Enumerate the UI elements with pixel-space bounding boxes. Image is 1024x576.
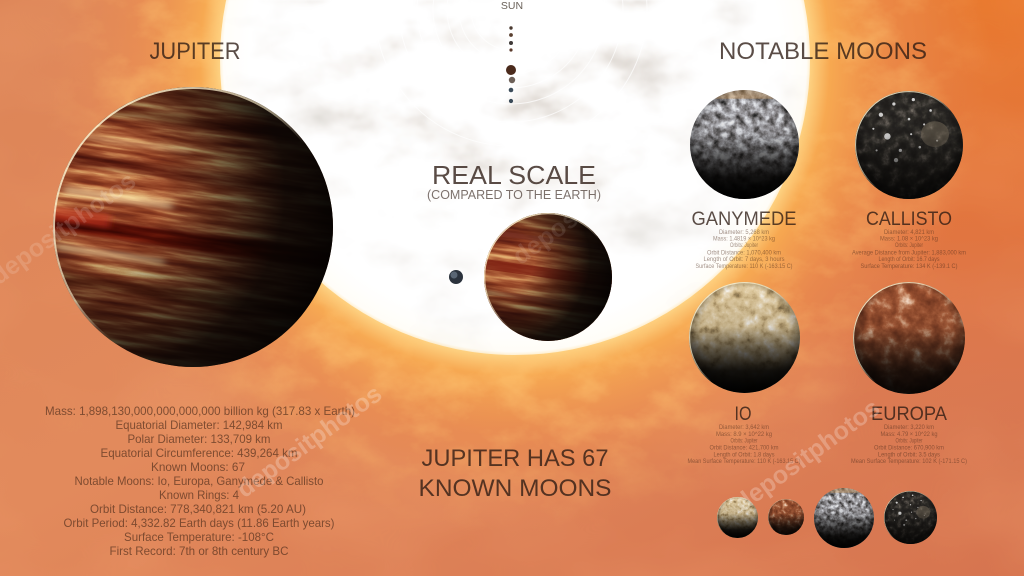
watermarks: depositphotos xyxy=(729,394,885,517)
moon facts: Io xyxy=(688,404,800,465)
callout: moon count: KNOWN MOONS xyxy=(418,475,612,502)
moon facts: Ganymede: Mass: 1.4819 × 10^23 kg xyxy=(713,236,775,242)
heading: real scale xyxy=(427,160,601,202)
Jupiter facts list: Orbit Distance: 778,340,821 km (5.20 AU) xyxy=(90,502,306,516)
watermarks xyxy=(0,0,885,517)
Jupiter facts list xyxy=(45,404,355,558)
watermarks: depositphotos xyxy=(507,147,663,270)
moon facts: Ganymede: Diameter: 5,268 km xyxy=(719,229,769,236)
planet: Earth scale dot xyxy=(449,270,463,284)
planet: Jupiter real scale xyxy=(484,213,612,341)
moon facts: Callisto: Length of Orbit: 16.7 days xyxy=(878,256,940,263)
moon facts: Io: Mean Surface Temperature: 110 K (-163.15 C) xyxy=(688,458,800,465)
moon facts: Europa: Length of Orbit: 3.5 days xyxy=(878,452,940,458)
moon size comparison row xyxy=(717,488,937,548)
Jupiter facts list: First Record: 7th or 8th century BC xyxy=(110,544,289,558)
moon facts: Ganymede: GANYMEDE xyxy=(692,209,796,230)
Jupiter facts list: Equatorial Circumference: 439,264 km xyxy=(100,446,298,460)
moon facts: Europa: Diameter: 3,220 km xyxy=(884,424,934,431)
moon facts: Ganymede: Orbit Distance: 1,070,400 km xyxy=(707,250,781,256)
moon facts: Io: Length of Orbit: 1.8 days xyxy=(714,452,774,458)
Jupiter facts list: Known Moons: 67 xyxy=(151,460,245,474)
moon facts: Europa: Orbits: Jupiter xyxy=(896,438,922,444)
moon: Ganymede xyxy=(690,90,799,199)
Jupiter facts list: Equatorial Diameter: 142,984 km xyxy=(116,418,282,432)
moon facts: Callisto: Average Distance from Jupiter: 1,883,000 km xyxy=(852,250,966,256)
moon: Europa xyxy=(853,282,965,394)
sun label: SUN xyxy=(501,0,523,12)
solar system orbits xyxy=(375,0,647,146)
moon facts: Callisto: Diameter: 4,821 km xyxy=(884,229,934,236)
moon facts: Europa: EUROPA xyxy=(871,404,947,425)
moon facts: Callisto xyxy=(852,209,966,270)
moon facts: Europa xyxy=(851,404,967,465)
Jupiter facts list: Mass: 1,898,130,000,000,000,000 billion kg (317.83 x Earth) xyxy=(45,404,355,418)
moon facts: Callisto: CALLISTO xyxy=(866,209,952,230)
Jupiter facts list: Notable Moons: Io, Europa, Ganymede & Callisto xyxy=(74,474,324,488)
moon: Io xyxy=(689,282,800,393)
moon facts: Europa: Orbit Distance: 670,900 km xyxy=(874,444,944,452)
moon facts: Callisto: Orbits: Jupiter xyxy=(895,242,923,249)
moon: Callisto xyxy=(855,91,963,199)
sun corona xyxy=(88,0,972,502)
moon facts: Europa: Mean Surface Temperature: 102 K (-171.15 C) xyxy=(851,458,967,465)
moon facts: Io: Diameter: 3,642 km xyxy=(719,424,769,431)
moon facts: Io: Orbit Distance: 421,700 km xyxy=(710,444,778,452)
planet: Jupiter large xyxy=(53,87,333,367)
callout: moon count: JUPITER HAS 67 xyxy=(422,445,608,472)
moon facts: Europa: Mass: 4.79 × 10^22 kg xyxy=(880,431,938,438)
Jupiter facts list: Known Rings: 4 xyxy=(159,488,239,502)
Jupiter facts list: Orbit Period: 4,332.82 Earth days (11.86 Earth years) xyxy=(64,516,334,530)
sun disc xyxy=(210,0,820,360)
solar system planets xyxy=(506,26,516,103)
moon facts: Callisto: Mass: 1.08 × 10^23 kg xyxy=(880,236,938,242)
heading: real scale: REAL SCALE xyxy=(432,160,596,190)
moon facts: Ganymede: Orbits: Jupiter xyxy=(730,242,758,249)
Jupiter facts list: Polar Diameter: 133,709 km xyxy=(128,432,270,446)
moon facts: Ganymede: Length of Orbit: 7 days, 3 hours xyxy=(704,256,784,263)
moon facts: Io: IO xyxy=(734,404,752,425)
heading: real scale: (COMPARED TO THE EARTH) xyxy=(427,188,601,202)
Jupiter facts list: Surface Temperature: -108°C xyxy=(124,530,274,544)
moon facts: Ganymede xyxy=(692,209,796,270)
moon facts: Io: Orbits: Jupiter xyxy=(730,438,758,444)
watermarks: depositphotos xyxy=(231,380,387,503)
moon facts: Ganymede: Surface Temperature: 110 K (-163.15 C) xyxy=(696,263,792,270)
callout: moon count xyxy=(418,445,612,502)
moon facts: Callisto: Surface Temperature: 134 K (-139.1 C) xyxy=(860,263,958,270)
moon facts: Io: Mass: 8.9 × 10^22 kg xyxy=(716,431,772,438)
title: notable moons: NOTABLE MOONS xyxy=(719,38,927,65)
title: Jupiter: JUPITER xyxy=(150,38,240,65)
